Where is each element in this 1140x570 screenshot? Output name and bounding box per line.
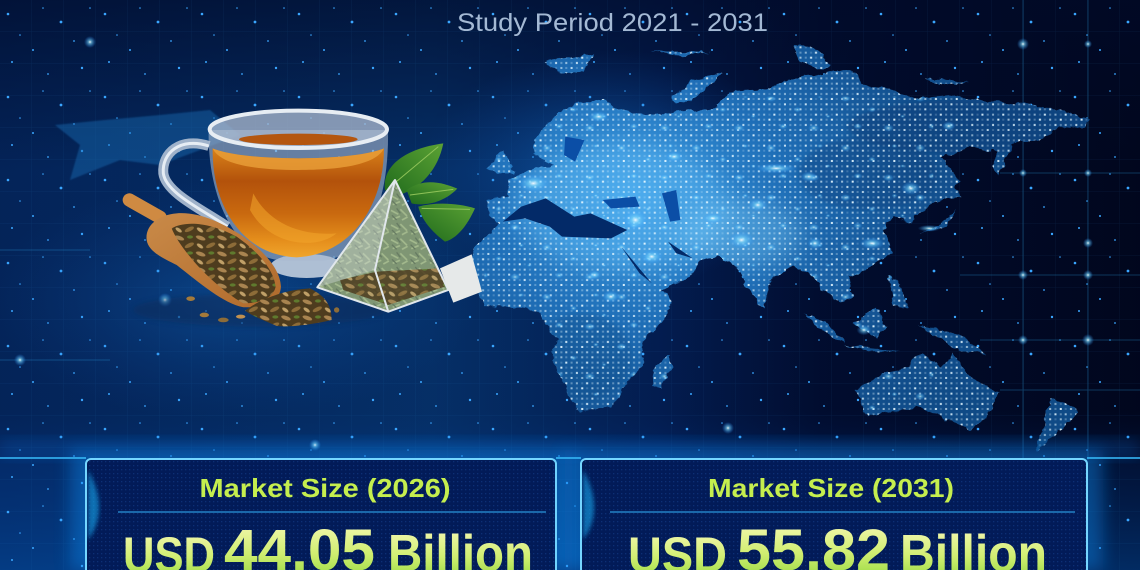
value: USD 55.82 Billion <box>630 529 1044 570</box>
icon: scoop <box>129 200 281 307</box>
tea surface highlight <box>213 148 384 170</box>
icon: tea liquid <box>213 148 384 257</box>
icon: spilled tea <box>186 288 339 326</box>
bottom glow line <box>0 457 1140 459</box>
sparkles <box>14 36 1094 451</box>
map: inland seas <box>503 198 693 283</box>
map: baltic and caspian <box>564 137 680 222</box>
icon: leaves <box>385 143 475 242</box>
scoop contents <box>172 224 276 303</box>
panel: market size 2026 <box>70 450 572 570</box>
icon: cup glass <box>209 130 388 261</box>
title: study period: Study Period 2021 - 2031 <box>457 9 768 37</box>
map: city lights <box>516 111 955 335</box>
map: faint Americas <box>55 110 240 180</box>
panel: market size 2031 <box>565 450 1103 570</box>
icon: saucer foot <box>271 254 343 278</box>
icon: cup handle <box>163 143 227 227</box>
tea reflection <box>250 193 337 243</box>
shadow under tea <box>133 293 387 327</box>
label: market size 2026: Market Size (2026) <box>200 473 450 503</box>
icon: pyramid tea bag <box>317 180 482 312</box>
value: USD 44.05 Billion <box>126 529 530 570</box>
map: world land <box>472 44 1090 452</box>
tea bag tag <box>440 254 482 303</box>
icon: cup rim <box>210 111 387 148</box>
tea illustration <box>129 111 482 327</box>
label: market size 2031: Market Size (2031) <box>708 473 954 503</box>
